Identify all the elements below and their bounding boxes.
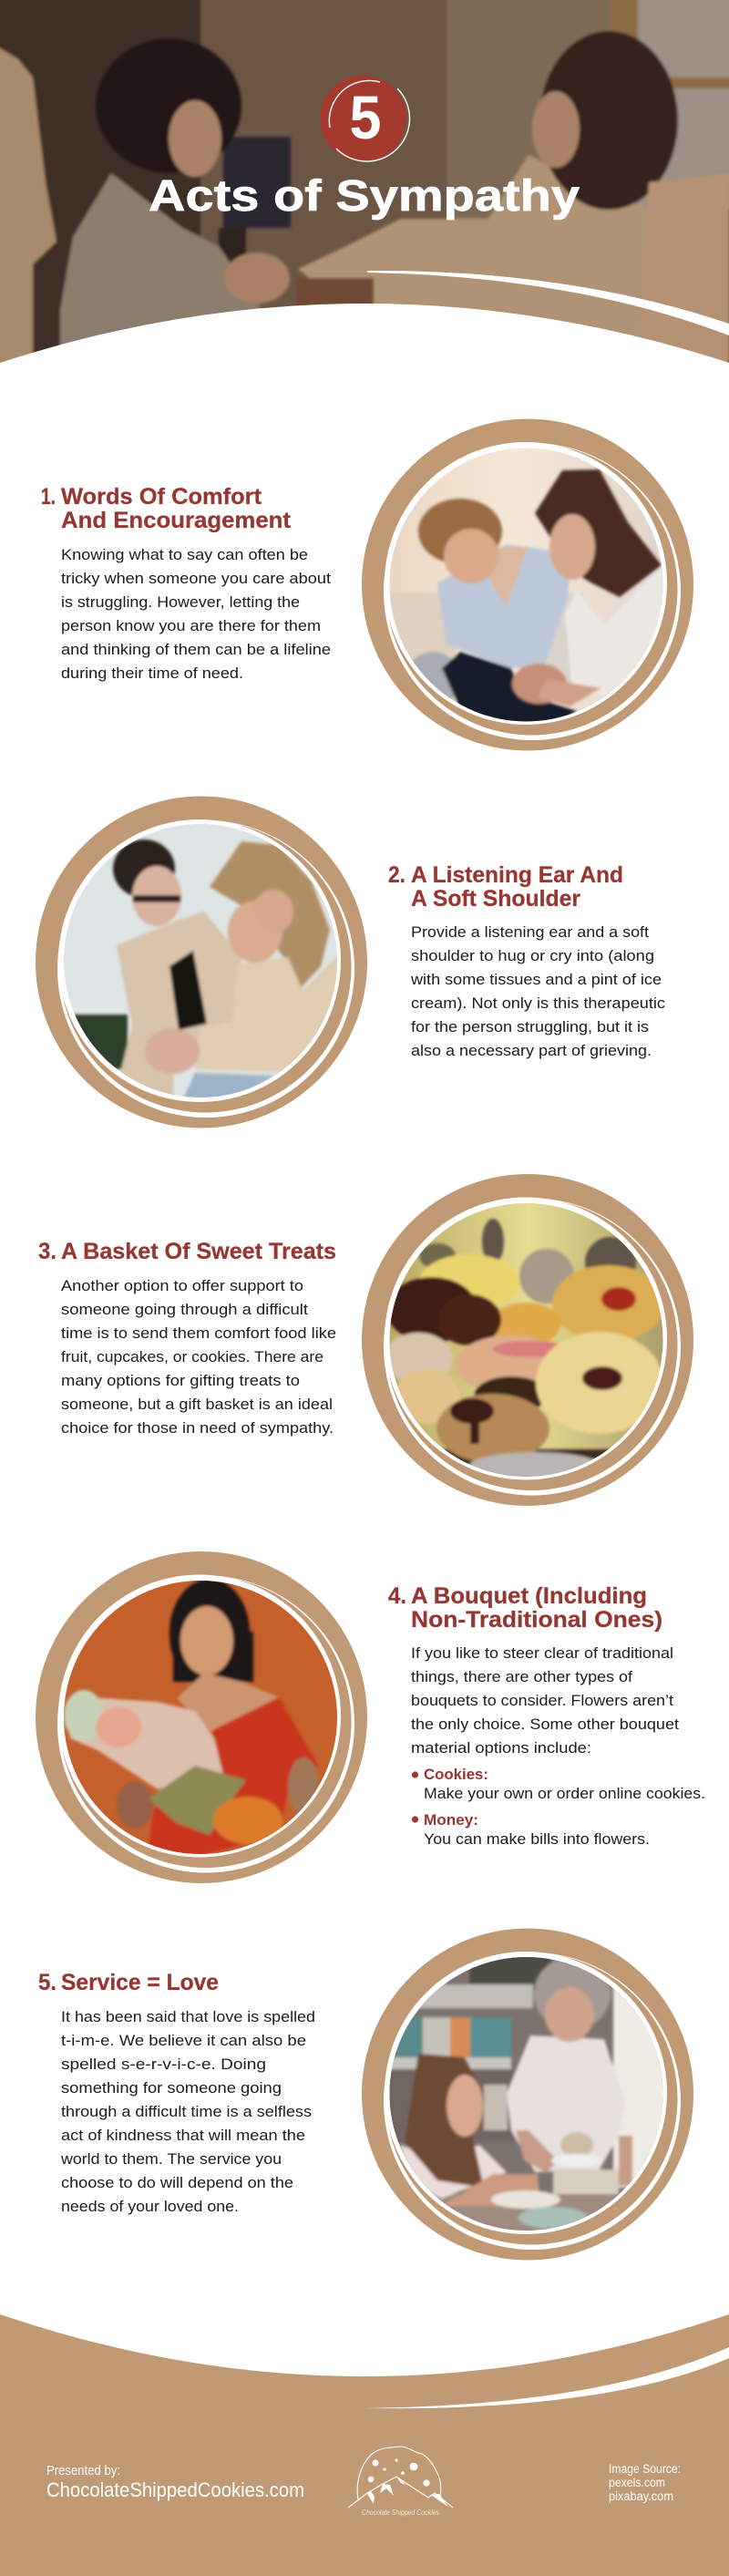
image source (609, 2462, 681, 2503)
heading 5: 5. (38, 1970, 56, 1995)
body text 3: someone going through a difficult (61, 1301, 308, 1318)
heading 4: Non-Traditional Ones) (411, 1607, 662, 1633)
heading 2: A Listening Ear And (411, 862, 623, 888)
section 3 (38, 1174, 693, 1506)
photo: two women on sofa (55, 820, 342, 1103)
number badge 5 (320, 75, 410, 162)
photo: two women comforting (383, 447, 674, 729)
section 5 (38, 1929, 693, 2261)
presented by (46, 2464, 304, 2501)
body text 4: things, there are other types of (411, 1668, 632, 1685)
heading 2 (388, 862, 623, 912)
body text 5 (60, 2008, 315, 2215)
image source: pixabay.com (609, 2489, 673, 2503)
heading 4: A Bouquet (Including (411, 1583, 647, 1609)
body text 2: with some tissues and a pint of ice (410, 971, 662, 988)
heading 5: Service = Love (61, 1970, 219, 1995)
heading 2: A Soft Shoulder (411, 886, 580, 912)
section 2 (36, 797, 666, 1128)
bullet: cookies (412, 1766, 705, 1802)
body text 3: Another option to offer support to (61, 1277, 303, 1294)
bullet: cookies: Cookies: (424, 1766, 488, 1783)
body text 4: the only choice. Some other bouquet (411, 1716, 679, 1733)
section 1 (41, 419, 693, 751)
body text 1 (61, 546, 331, 682)
photo: sweet treats (390, 1203, 663, 1477)
footer white swoosh (364, 2347, 729, 2408)
heading 3: 3. (38, 1239, 56, 1264)
logo: cookie and mountains (348, 2447, 453, 2517)
body text 5: world to them. The service you (60, 2150, 282, 2168)
image source: pexels.com (609, 2476, 665, 2489)
hero white swoosh (367, 271, 729, 335)
ring frame 1 (362, 419, 693, 751)
body text 1: during their time of need. (61, 665, 243, 682)
body text 5: spelled s-e-r-v-i-c-e. Doing (61, 2056, 266, 2073)
image source: Image Source: (609, 2462, 681, 2476)
body text 5: act of kindness that will mean the (61, 2127, 305, 2144)
body text 1: is struggling. However, letting the (61, 593, 300, 611)
ring frame 3 (362, 1174, 693, 1506)
body text 1: tricky when someone you care about (61, 570, 331, 587)
heading 1: And Encouragement (61, 508, 292, 533)
body text 5: t-i-m-e. We believe it can also be (61, 2032, 306, 2049)
photo: woman with money bouquet (59, 1577, 342, 1860)
body text 4 (411, 1644, 679, 1757)
body text 2: cream). Not only is this therapeutic (411, 994, 666, 1012)
heading 1 (41, 484, 292, 533)
heading 1: 1. (41, 484, 56, 510)
presented by: ChocolateShippedCookies.com (46, 2478, 304, 2501)
logo: cookie and mountains: Chocolate Shipped Cookies (362, 2509, 439, 2517)
body text 5: choose to do will depend on the (61, 2174, 293, 2191)
body text 4: If you like to steer clear of traditional (411, 1644, 673, 1662)
title: Acts of Sympathy (149, 172, 580, 221)
hero photo banner (0, 0, 729, 374)
body text 2: shoulder to hug or cry into (along (411, 947, 654, 964)
heading 2: 2. (388, 862, 406, 888)
body text 4: bouquets to consider. Flowers aren’t (411, 1692, 673, 1709)
body text 5: through a difficult time is a selfless (61, 2103, 312, 2120)
body text 3: many options for gifting treats to (61, 1372, 300, 1389)
body text 1: and thinking of them can be a lifeline (61, 641, 331, 658)
body text 3: fruit, cupcakes, or cookies. There are (61, 1348, 323, 1365)
body text 2 (410, 923, 666, 1059)
body text 3 (61, 1277, 336, 1437)
photo: older woman serving girl (390, 1957, 663, 2231)
number badge 5: 5 (350, 84, 381, 152)
body text 3: someone, but a gift basket is an ideal (61, 1396, 333, 1413)
body text 2: Provide a listening ear and a soft (411, 923, 649, 941)
body text 3: time is to send them comfort food like (61, 1324, 336, 1342)
body text 1: person know you are there for them (61, 617, 321, 634)
heading 1: Words Of Comfort (61, 484, 262, 510)
bullet: money: Money: (424, 1811, 478, 1829)
body text 5: needs of your loved one. (61, 2198, 239, 2215)
body text 2: for the person struggling, but it is (411, 1018, 649, 1036)
bullet: money: You can make bills into flowers. (424, 1830, 650, 1848)
bullet: money (412, 1811, 650, 1848)
body text 5: It has been said that love is spelled (61, 2008, 315, 2025)
ring frame 2 (36, 797, 367, 1128)
hero curved white edge (0, 304, 729, 419)
ring frame 4 (36, 1551, 367, 1883)
heading 4: 4. (388, 1583, 406, 1609)
presented by: Presented by: (46, 2464, 120, 2478)
heading 4 (388, 1583, 662, 1633)
ring frame 5 (362, 1929, 693, 2261)
body text 2: also a necessary part of grieving. (411, 1042, 652, 1059)
body text 1: Knowing what to say can often be (61, 546, 308, 563)
body text 5: something for someone going (61, 2079, 282, 2097)
footer band (0, 2314, 729, 2576)
section 4 (36, 1551, 705, 1883)
heading 3: A Basket Of Sweet Treats (61, 1239, 336, 1264)
body text 4: material options include: (411, 1739, 591, 1757)
body text 3: choice for those in need of sympathy. (61, 1419, 334, 1437)
bullet: cookies: Make your own or order online cookies. (424, 1785, 705, 1802)
